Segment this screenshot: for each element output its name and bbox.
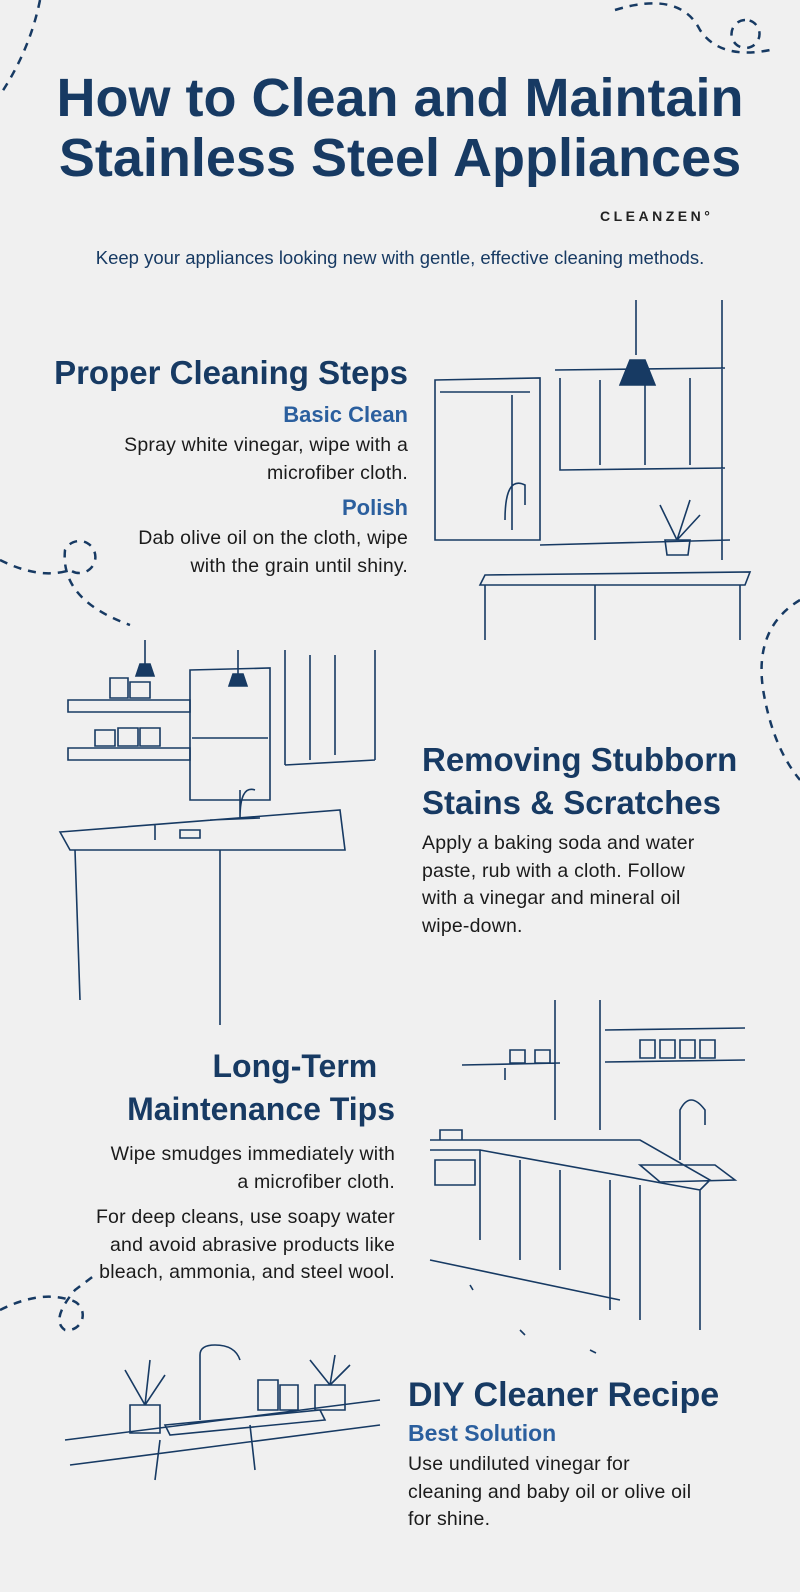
panel: long-term maintenance tips: Maintenance Tips xyxy=(127,1091,395,1127)
panel: removing stubborn stains: Apply a baking soda and water xyxy=(422,832,694,854)
panel: long-term maintenance tips xyxy=(96,1048,395,1283)
panel: removing stubborn stains: Stains & Scratches xyxy=(422,784,721,821)
panel: removing stubborn stains: paste, rub with a cloth. Follow xyxy=(422,860,685,882)
logo: CLEANZEN° xyxy=(600,208,713,224)
subtitle: Keep your appliances looking new with gentle, effective cleaning methods. xyxy=(96,247,704,268)
panel: long-term maintenance tips: bleach, ammonia, and steel wool. xyxy=(99,1261,395,1283)
panel: DIY cleaner recipe: cleaning and baby oil or olive oil xyxy=(408,1480,691,1502)
panel: proper cleaning steps xyxy=(54,354,408,576)
panel: removing stubborn stains: with a vinegar and mineral oil xyxy=(422,887,681,909)
panel: proper cleaning steps: Polish xyxy=(342,495,408,520)
title: How to Clean and Maintain xyxy=(56,68,744,128)
panel: long-term maintenance tips: a microfiber cloth. xyxy=(237,1170,395,1192)
panel: long-term maintenance tips: Long-Term xyxy=(212,1048,377,1084)
panel: proper cleaning steps: microfiber cloth. xyxy=(267,462,408,484)
panel: long-term maintenance tips: For deep cleans, use soapy water xyxy=(96,1206,395,1228)
title: Stainless Steel Appliances xyxy=(59,128,741,188)
panel: DIY cleaner recipe: Best Solution xyxy=(408,1420,556,1446)
panel: proper cleaning steps: Spray white vinegar, wipe with a xyxy=(124,434,408,456)
panel: DIY cleaner recipe xyxy=(408,1376,719,1530)
panel: long-term maintenance tips: Wipe smudges immediately with xyxy=(111,1143,395,1165)
panel: proper cleaning steps: Proper Cleaning Steps xyxy=(54,354,408,391)
panel: removing stubborn stains xyxy=(422,741,737,936)
panel: DIY cleaner recipe: DIY Cleaner Recipe xyxy=(408,1376,719,1414)
panel: proper cleaning steps: Basic Clean xyxy=(283,402,408,427)
panel: long-term maintenance tips: and avoid abrasive products like xyxy=(110,1234,395,1256)
panel: proper cleaning steps: with the grain until shiny. xyxy=(191,554,408,576)
panel: DIY cleaner recipe: Use undiluted vinegar for xyxy=(408,1453,630,1475)
panel: proper cleaning steps: Dab olive oil on the cloth, wipe xyxy=(138,527,408,549)
title xyxy=(56,68,744,188)
panel: removing stubborn stains: Removing Stubborn xyxy=(422,741,737,778)
panel: removing stubborn stains: wipe-down. xyxy=(422,914,523,936)
panel: DIY cleaner recipe: for shine. xyxy=(408,1508,490,1530)
